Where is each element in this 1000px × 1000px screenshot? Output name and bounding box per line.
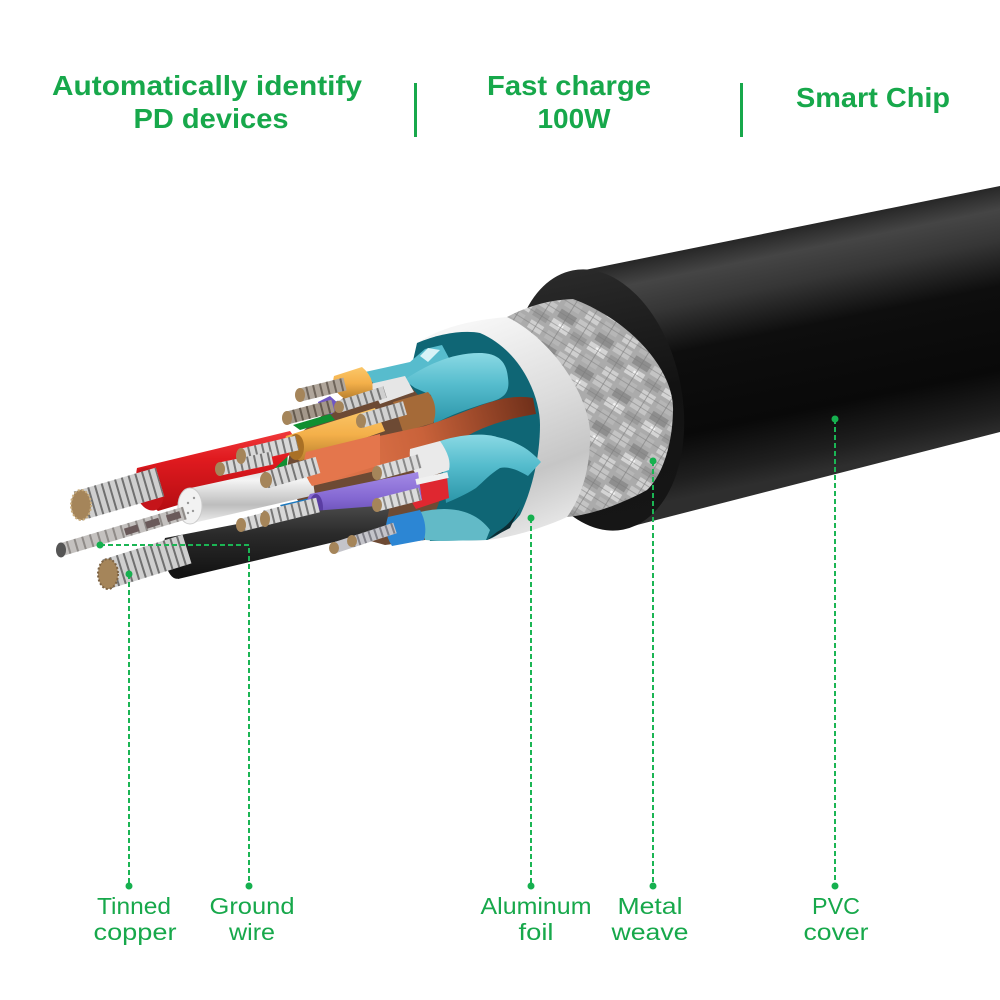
callout: Aluminum foil: foil	[518, 919, 554, 945]
cable illustration	[56, 186, 1000, 589]
thin strands	[78, 384, 448, 574]
upper teal shield	[404, 353, 508, 424]
metal weave braid	[507, 299, 673, 517]
white center bundle	[178, 462, 315, 524]
bottom light teal shield	[420, 509, 490, 541]
small yellow wire	[333, 367, 373, 399]
inner cavity	[395, 332, 540, 541]
blue wire	[386, 510, 425, 546]
white insulated wire	[410, 441, 450, 480]
callout: PVC cover: PVC	[812, 893, 860, 919]
red wire	[130, 431, 300, 514]
ground wire and tinned strands	[56, 513, 185, 558]
callout: Ground wire: wire	[228, 919, 275, 945]
callout: Aluminum foil	[480, 514, 592, 945]
callout: Tinned copper: copper	[94, 919, 177, 945]
strand ends	[71, 388, 382, 589]
orange wire front	[304, 434, 380, 486]
heading: Fast charge 100W: 100W	[538, 103, 611, 134]
aluminum foil ring	[417, 317, 590, 540]
callout: Tinned copper: Tinned	[97, 893, 171, 919]
callout: Ground wire	[96, 542, 294, 945]
orange-brown wire	[304, 397, 536, 486]
callout: Metal weave	[610, 458, 688, 945]
callout: Ground wire: Ground	[210, 893, 294, 919]
blue inner wire	[280, 498, 318, 527]
green wire	[267, 414, 335, 469]
lower teal shield	[440, 435, 541, 503]
callout: Metal weave: Metal	[618, 893, 682, 919]
callout: Tinned copper	[94, 570, 177, 945]
PVC cover jacket	[490, 186, 1000, 546]
yellow wire	[285, 408, 385, 461]
small red wire	[410, 476, 449, 509]
upper teal sleeve	[365, 345, 450, 386]
heading: Automatically identify PD devices: PD devices	[134, 103, 288, 134]
purple wire	[305, 472, 422, 524]
heading: Fast charge 100W: Fast charge	[487, 70, 651, 101]
callout: PVC cover: cover	[804, 919, 869, 945]
heading: Smart Chip: Smart Chip	[796, 82, 950, 113]
callout: PVC cover	[804, 416, 869, 945]
callout: Aluminum foil: Aluminum	[480, 893, 592, 919]
heading: Automatically identify PD devices	[52, 70, 362, 134]
callout: Metal weave: weave	[610, 919, 688, 945]
inner wire backing	[285, 372, 440, 545]
black wire	[162, 505, 390, 580]
heading: Automatically identify PD devices: Automatically identify	[52, 70, 362, 101]
white small wire	[370, 376, 414, 404]
brown wire	[393, 392, 435, 432]
heading: Fast charge 100W	[487, 70, 651, 134]
small purple wire	[318, 396, 340, 415]
